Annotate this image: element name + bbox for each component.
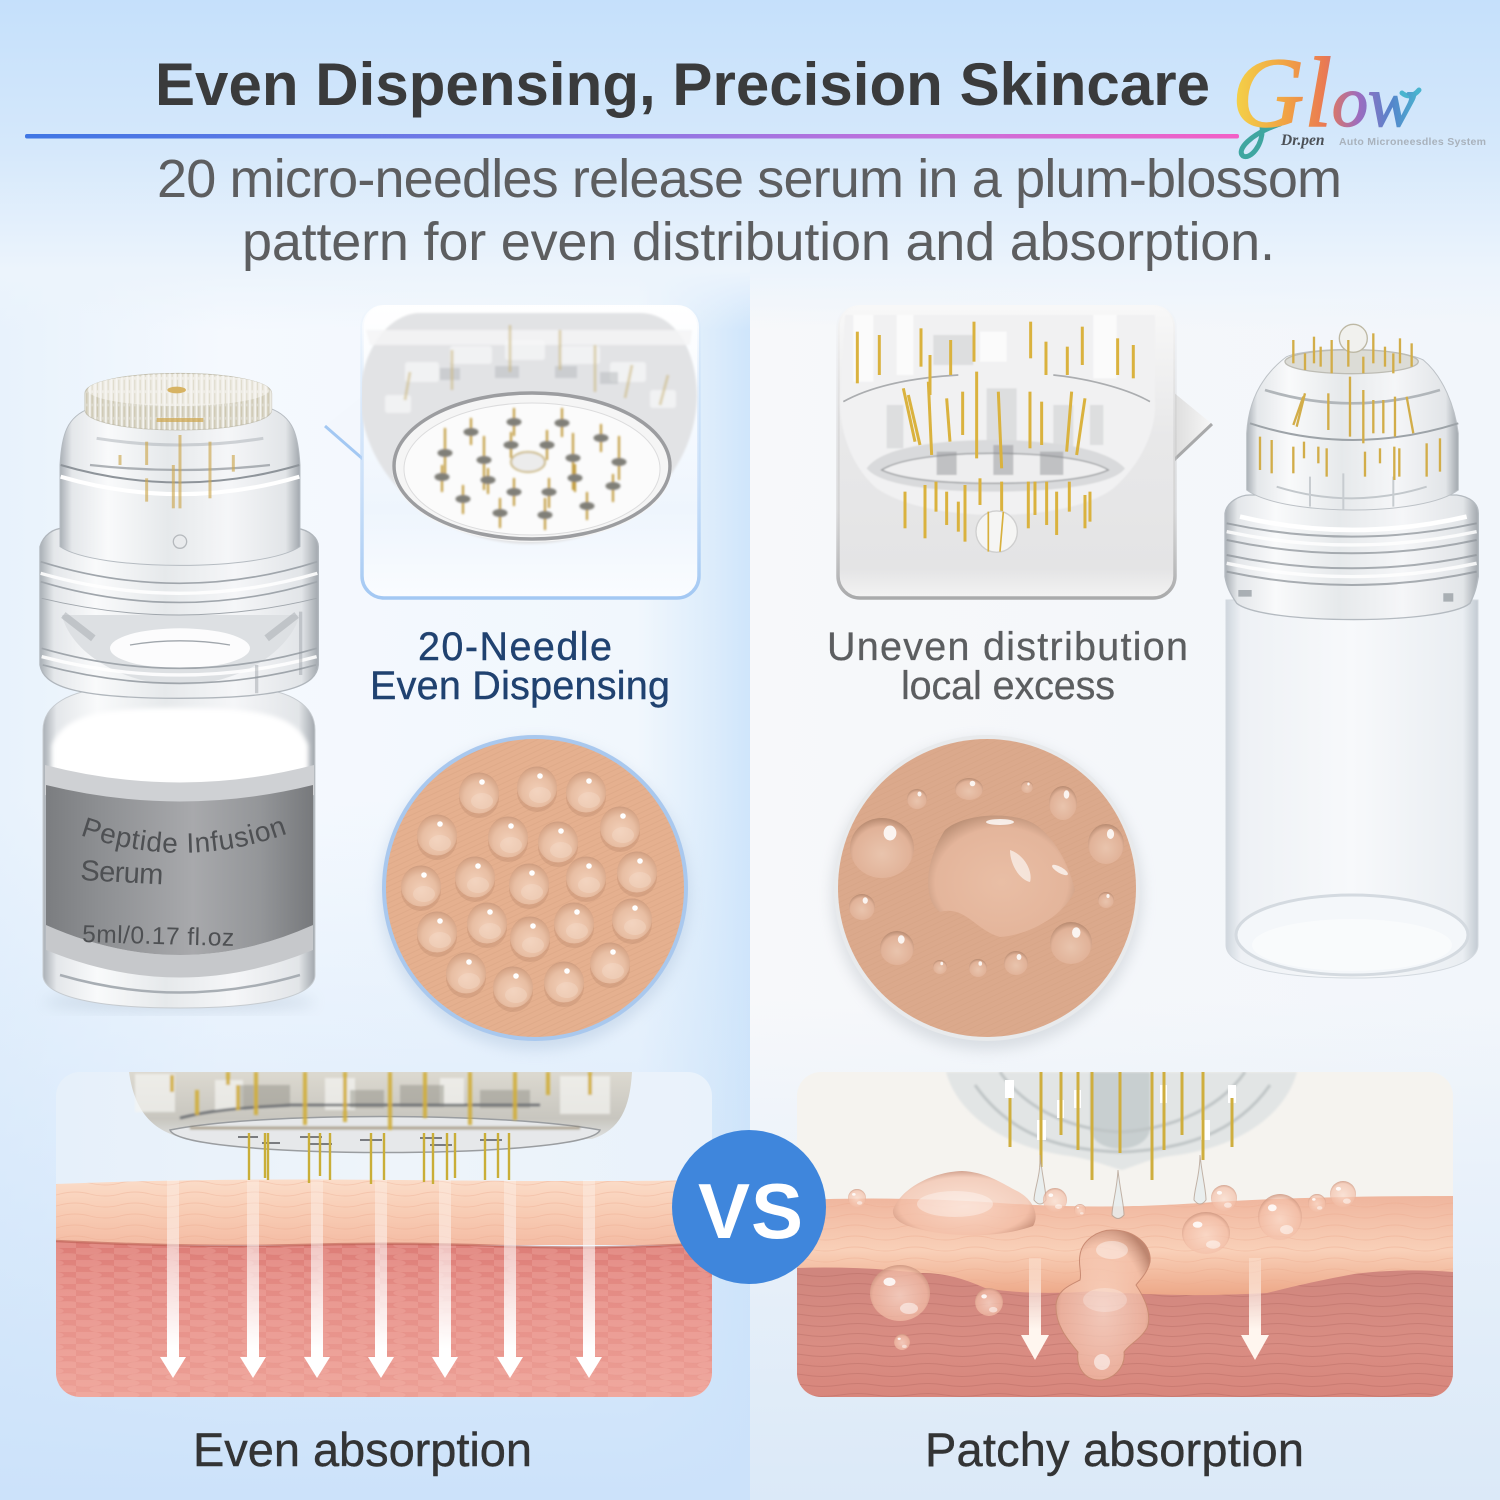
scattered droplets (849, 778, 1124, 977)
grey label (46, 785, 313, 955)
VS badge: VS (698, 1167, 803, 1255)
subtitle (157, 149, 1342, 272)
pooled droplet on surface (893, 1171, 1036, 1235)
skin circle: even droplets (380, 735, 690, 1050)
needle head disc (85, 373, 272, 430)
gradient rule under title (25, 134, 1239, 138)
upper glass (840, 315, 1155, 515)
glass cap and needles (1225, 324, 1478, 620)
pointer (325, 395, 364, 460)
gold inner needles (120, 435, 233, 508)
subtitle: 20 micro-needles release serum in a plum-blossom (157, 149, 1342, 209)
label text (80, 832, 292, 853)
dermis layer (797, 1262, 1453, 1400)
pointer (1173, 392, 1212, 460)
logo: Dr.pen Glow (1232, 37, 1486, 157)
panel box (838, 305, 1175, 598)
white vial shoulder (52, 708, 308, 785)
caption: patchy absorption: Patchy absorption (925, 1423, 1304, 1476)
logo: Dr.pen Glow: Auto Microneesdles System (1339, 136, 1486, 148)
panel: patchy absorption skin cross-section (797, 1072, 1453, 1400)
silver bands (45, 765, 314, 812)
applicator head with needles (129, 1072, 632, 1184)
absorption arrows (160, 1180, 602, 1378)
product: empty vial with dome needle head (1225, 324, 1478, 978)
applicator underside (360, 313, 697, 544)
logo: Dr.pen Glow: Dr.pen (1280, 132, 1324, 149)
caption: 20-needle even dispensing (370, 625, 670, 708)
VS badge (672, 1130, 826, 1284)
caption: uneven distribution local excess: Uneven distribution (827, 625, 1188, 669)
product: serum vial with needle head (39, 372, 319, 1014)
product: serum vial with needle head: Serum (80, 855, 164, 891)
caption: 20-needle even dispensing: Even Dispensing (370, 664, 670, 708)
bottom ball (976, 511, 1017, 552)
vial body (43, 688, 315, 1008)
20 needle pattern (434, 408, 626, 530)
product: serum vial with needle head: 5ml/0.17 fl.oz (82, 921, 234, 952)
scattered droplets (848, 1181, 1356, 1350)
panel: even-dispensing close-up (325, 305, 699, 598)
caption: uneven distribution local excess (827, 625, 1188, 708)
caption: 20-needle even dispensing: 20-Needle (418, 625, 612, 669)
dripping serum strands (1034, 1155, 1206, 1218)
threaded collar (40, 528, 318, 698)
clear dome (1247, 350, 1458, 510)
title: Even Dispensing, Precision Skincare (155, 51, 1210, 118)
domed applicator (840, 315, 1155, 552)
tall merged droplet (1056, 1230, 1150, 1380)
glass base (60, 975, 300, 992)
large pooled droplet (928, 815, 1075, 937)
gold needles (857, 322, 1133, 548)
domed applicator with needles (946, 1072, 1297, 1180)
skin circle: uneven droplets (832, 735, 1142, 1050)
empty vial (1226, 600, 1478, 978)
limited absorption arrows (1021, 1258, 1269, 1360)
threaded collar (1225, 495, 1478, 620)
panel: even absorption skin cross-section (56, 1072, 712, 1400)
panel: uneven distribution close-up (838, 305, 1212, 598)
glass cap and head (40, 373, 318, 698)
product: serum vial with needle head: Peptide Infusion (82, 818, 286, 853)
droplets (401, 766, 657, 1012)
dermis layer (56, 1241, 712, 1400)
panel box (362, 305, 699, 598)
subtitle: pattern for even distribution and absorption. (242, 212, 1275, 272)
caption: uneven distribution local excess: local excess (901, 664, 1115, 708)
logo: Dr.pen Glow: Glow (1232, 37, 1416, 148)
epidermis layer (56, 1180, 712, 1245)
epidermis layer (797, 1196, 1453, 1295)
gold needles (1260, 333, 1440, 480)
saucer (867, 440, 1125, 492)
clear dome (60, 408, 300, 565)
caption: even absorption: Even absorption (193, 1423, 532, 1476)
